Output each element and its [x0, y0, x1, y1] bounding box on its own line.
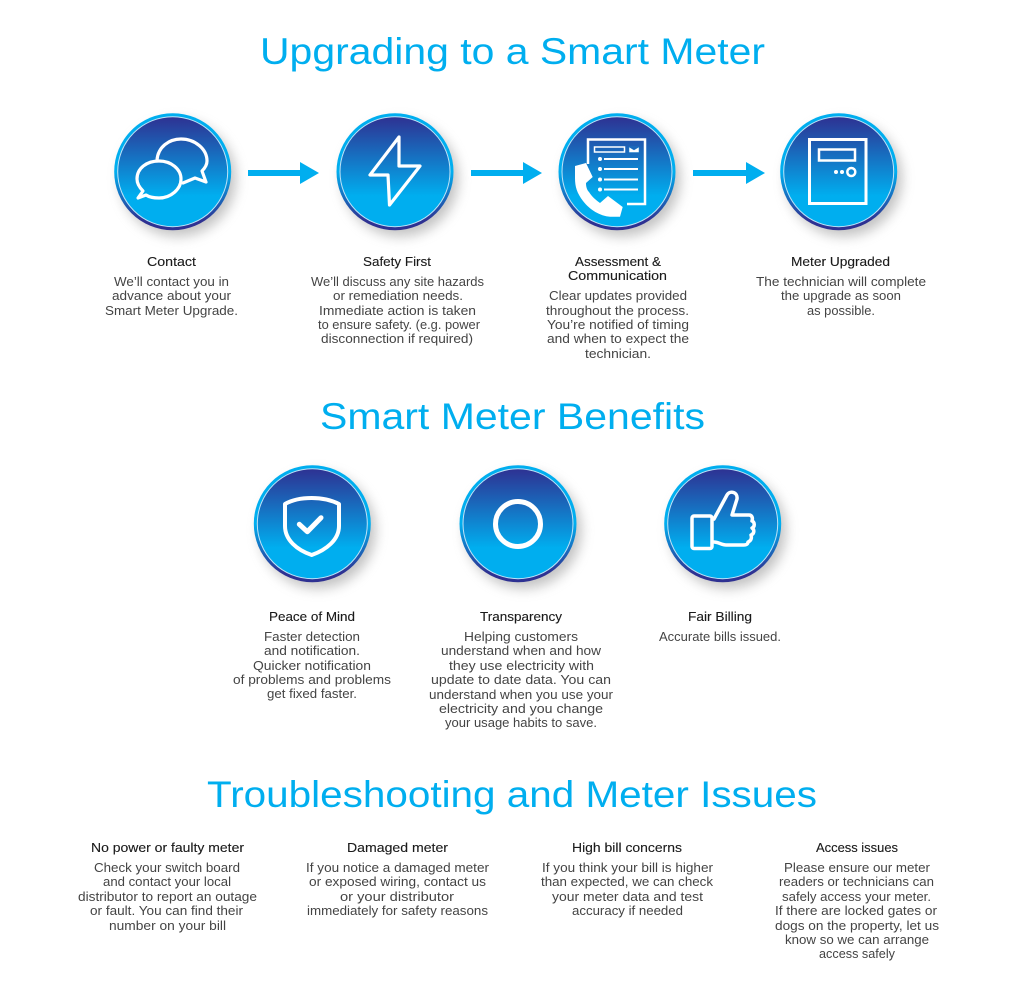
issue: high bill: than expected, we can check [541, 874, 714, 889]
issue: damaged meter: Damaged meter [347, 840, 449, 855]
text: safety first: to ensure safety. (e.g. power [318, 317, 481, 332]
issue: access: know so we can arrange [785, 932, 929, 947]
text: contact: We’ll contact you in [114, 274, 229, 289]
text: safety first: or remediation needs. [333, 288, 463, 303]
step: contact icon [114, 113, 236, 236]
text: peace of mind: and notification. [264, 643, 360, 658]
arrow 3 [693, 162, 765, 184]
text: safety first: Immediate action is taken [319, 303, 476, 318]
issue: no power: number on your bill [109, 918, 226, 933]
text: transparency: Helping customers [464, 629, 579, 644]
title: upgrading: Upgrading to a Smart Meter [260, 31, 765, 72]
issue: damaged meter [306, 840, 490, 918]
title: benefits: Smart Meter Benefits [320, 396, 705, 437]
issue: access: access safely [819, 946, 895, 961]
benefit: thumbs up icon [664, 465, 786, 588]
issue: damaged meter: or exposed wiring, contact us [309, 874, 487, 889]
text: transparency [429, 609, 614, 730]
issue: damaged meter: or your distributor [340, 889, 455, 904]
benefit: transparency icon [460, 465, 581, 588]
text: meter upgraded: the upgrade as soon [781, 288, 901, 303]
text: safety first: disconnection if required) [321, 331, 473, 346]
text: fair billing [659, 609, 781, 644]
step: meter icon [780, 113, 902, 236]
text: transparency: Transparency [480, 609, 563, 624]
issue: damaged meter: immediately for safety reasons [307, 903, 489, 918]
issue: no power: No power or faulty meter [91, 840, 245, 855]
text: meter upgraded [756, 254, 926, 318]
text: contact: Smart Meter Upgrade. [105, 303, 238, 318]
issue: no power: and contact your local [103, 874, 231, 889]
text: fair billing: Accurate bills issued. [659, 629, 781, 644]
text: assessment: throughout the process. [546, 303, 689, 318]
text: peace of mind: Peace of Mind [269, 609, 355, 624]
text: transparency: they use electricity with [449, 658, 594, 673]
text: safety first: We’ll discuss any site hazards [311, 274, 484, 289]
issue: access: Access issues [816, 840, 898, 855]
title: troubleshooting: Troubleshooting and Meter Issues [207, 774, 817, 815]
text: contact: advance about your [112, 288, 232, 303]
issue: high bill: High bill concerns [572, 840, 683, 855]
text: meter upgraded: as possible. [807, 303, 875, 318]
issue: no power: Check your switch board [94, 860, 240, 875]
issue: high bill: If you think your bill is higher [542, 860, 714, 875]
text: contact [105, 254, 238, 318]
text: assessment: Communication [568, 268, 667, 283]
issue: no power: or fault. You can find their [90, 903, 244, 918]
arrow 2 [471, 162, 542, 184]
text: meter upgraded: Meter Upgraded [791, 254, 890, 269]
text: peace of mind: of problems and problems [233, 672, 392, 687]
issue: access: readers or technicians can [779, 874, 934, 889]
text: transparency: understand when you use your [429, 687, 614, 702]
issue: high bill: accuracy if needed [572, 903, 683, 918]
text: meter upgraded: The technician will complete [756, 274, 926, 289]
issue: no power [78, 840, 257, 933]
text: transparency: electricity and you change [439, 701, 603, 716]
text: safety first: Safety First [363, 254, 431, 269]
text: peace of mind: Quicker notification [253, 658, 371, 673]
step: safety icon [336, 113, 458, 236]
text: contact: Contact [147, 254, 196, 269]
text: assessment: Clear updates provided [549, 288, 687, 303]
issue: access: dogs on the property, let us [775, 918, 940, 933]
text: fair billing: Fair Billing [688, 609, 752, 624]
issue: access [775, 840, 940, 961]
issue: no power: distributor to report an outage [78, 889, 257, 904]
text: peace of mind [233, 609, 392, 701]
text: transparency: understand when and how [441, 643, 602, 658]
text: assessment: Assessment & [575, 254, 661, 269]
text: transparency: update to date data. You can [431, 672, 611, 687]
step: assessment icon [558, 113, 680, 236]
issue: access: Please ensure our meter [784, 860, 931, 875]
text: assessment: technician. [585, 346, 651, 361]
issue: access: safely access your meter. [782, 889, 931, 904]
issue: high bill: your meter data and test [552, 889, 703, 904]
text: peace of mind: Faster detection [264, 629, 360, 644]
issue: high bill [541, 840, 714, 918]
issue: damaged meter: If you notice a damaged meter [306, 860, 490, 875]
arrow 1 [248, 162, 319, 184]
text: safety first [311, 254, 484, 346]
text: assessment [546, 254, 689, 361]
issue: access: If there are locked gates or [775, 903, 938, 918]
text: assessment: You’re notified of timing [547, 317, 689, 332]
text: peace of mind: get fixed faster. [267, 686, 357, 701]
benefit: shield icon [254, 465, 376, 588]
text: transparency: your usage habits to save. [445, 715, 597, 730]
text: assessment: and when to expect the [547, 331, 689, 346]
